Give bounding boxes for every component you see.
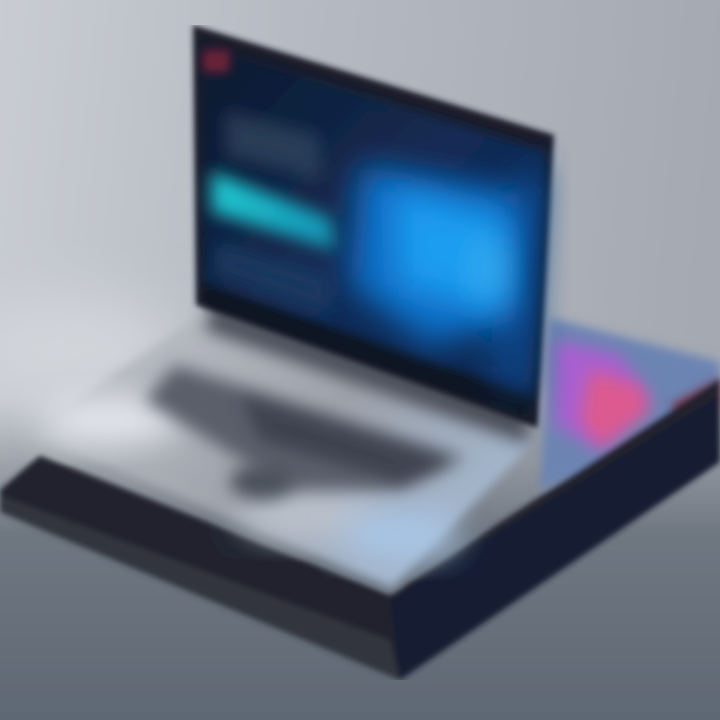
red corner icon [203, 50, 229, 72]
keyboard deck [30, 305, 535, 588]
hinge band [205, 305, 530, 445]
screen right edge blue [490, 160, 545, 395]
keyboard dark keys [240, 395, 450, 482]
deck highlight [40, 396, 180, 444]
blue wallpaper [350, 165, 520, 345]
grey text block [225, 110, 320, 180]
cyan highlight [470, 235, 510, 305]
lower panel block [215, 240, 330, 315]
tablet behind the laptop [540, 318, 720, 490]
deck blue reflection [340, 511, 460, 559]
bright window highlight [395, 190, 505, 310]
screen bezel [193, 25, 554, 428]
tablet purple wallpaper [555, 340, 650, 450]
laptop base and stacked dark slab [0, 378, 720, 680]
laptop screen [193, 25, 554, 428]
left slab [0, 495, 400, 680]
trackpad shadow [230, 464, 294, 500]
lower screen dark band [203, 285, 530, 420]
right slab [390, 395, 720, 680]
keyboard [145, 365, 465, 490]
light patch at left of the laptop [0, 295, 180, 405]
lower deck light [240, 491, 380, 539]
screen panel [203, 45, 545, 400]
tablet red edge [670, 378, 720, 425]
tablet pink wallpaper [580, 370, 650, 448]
teal bar [212, 172, 335, 250]
